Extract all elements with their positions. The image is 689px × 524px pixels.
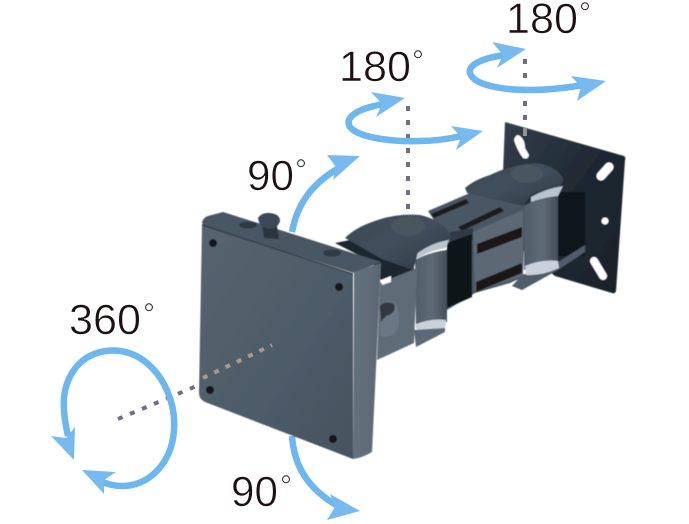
knob xyxy=(262,226,279,239)
plate right flange xyxy=(353,263,381,459)
label: 180 degrees lower hinge: 180 xyxy=(339,43,411,91)
label: 90 degrees bottom: 90 xyxy=(231,468,278,516)
plate top lip xyxy=(202,212,381,273)
upper hinge cap xyxy=(465,163,563,206)
top screw right xyxy=(323,250,341,256)
arrow: 90 degree upward tilt xyxy=(292,155,360,232)
dotted axis: lower hinge xyxy=(406,106,410,211)
bracket assembly xyxy=(199,122,625,459)
icon: plate keyhole xyxy=(514,135,529,159)
arrow: 180 degree lower hinge rotation xyxy=(349,92,483,150)
label: 90 degrees bottom: ° xyxy=(280,470,292,503)
upper hinge xyxy=(465,163,585,290)
lower hinge dome xyxy=(391,216,425,236)
underside shadow xyxy=(335,240,414,286)
arrow: 360 degree rotation xyxy=(51,351,174,494)
dotted axis: upper hinge xyxy=(523,59,527,136)
back wall plate xyxy=(503,122,625,293)
side bracket with slot xyxy=(377,268,417,360)
arrow: 180 degree upper hinge rotation xyxy=(470,42,606,101)
dotted axis: plate rotation xyxy=(118,345,272,419)
icon: plate slot lower right xyxy=(594,261,603,276)
arrow: 90 degree downward tilt xyxy=(292,436,360,520)
plate mounting holes xyxy=(209,239,217,247)
icon: plate slot upper right xyxy=(601,167,609,176)
lower hinge cylinder xyxy=(415,250,447,328)
label: 360 degrees: ° xyxy=(143,298,155,331)
lower hinge xyxy=(335,215,472,347)
plate front face xyxy=(199,225,353,459)
telescoping arm xyxy=(428,193,525,310)
label: 90 degrees top: ° xyxy=(295,154,307,187)
arrowhead lower xyxy=(82,470,116,494)
top screw left xyxy=(239,222,257,228)
lower hinge cap xyxy=(345,215,450,270)
label: 360 degrees: 360 xyxy=(69,296,141,344)
icon: plate center hole xyxy=(602,218,608,224)
upper hinge cylinder xyxy=(524,194,558,270)
arrowhead upper xyxy=(51,427,75,460)
label: 90 degrees top: 90 xyxy=(247,152,294,200)
label: 180 degrees lower hinge: ° xyxy=(412,45,424,78)
upper hinge dome xyxy=(511,165,543,183)
arm slots xyxy=(477,227,522,254)
front mounting plate xyxy=(199,212,417,459)
